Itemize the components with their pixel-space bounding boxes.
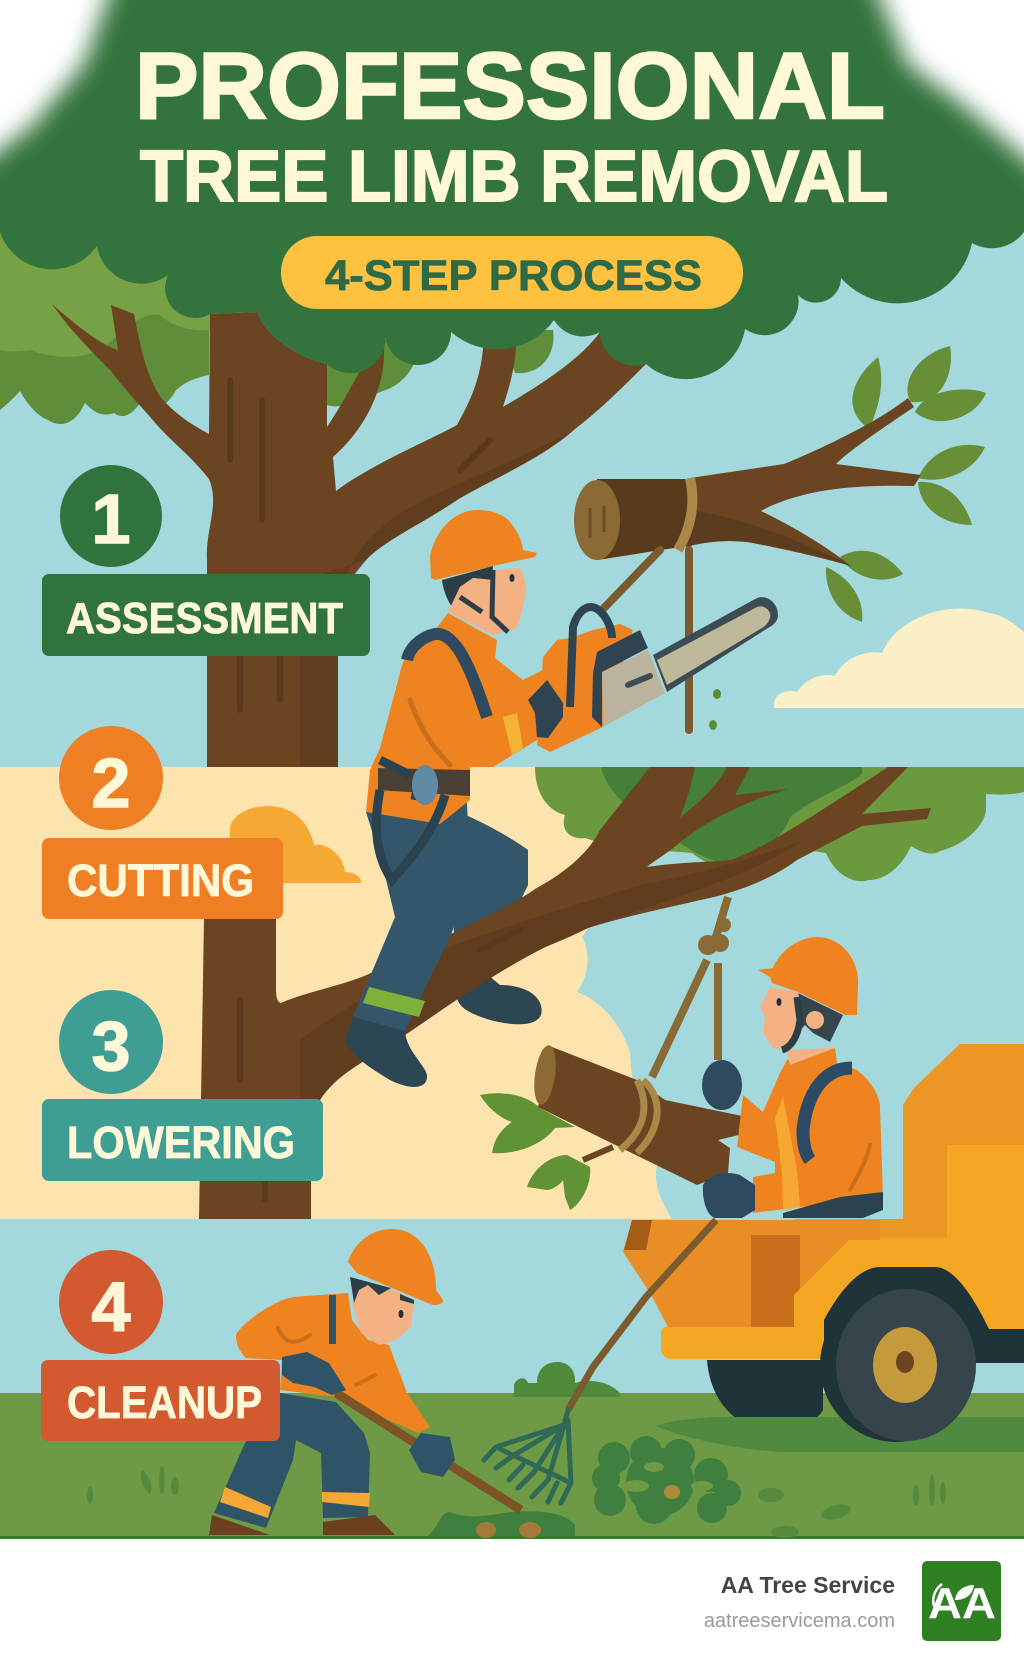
number 1: 1 (92, 480, 130, 558)
label: cutting (42, 838, 283, 919)
rake leaning on truck (484, 1220, 716, 1503)
logo: AA (928, 1579, 996, 1628)
trouser stripe (363, 987, 425, 1017)
title line 1: PROFESSIONAL (135, 33, 885, 138)
wheel arch (824, 1267, 1024, 1363)
number badge 3 (59, 990, 163, 1094)
label: assessment (42, 574, 370, 656)
helmet (758, 937, 858, 1015)
hair (350, 1277, 391, 1303)
hair (442, 566, 493, 608)
harness (378, 768, 470, 796)
fender (794, 1240, 947, 1330)
lowered limb with rope (480, 897, 752, 1210)
footer brand (704, 1561, 1001, 1641)
grass tufts and leaves (87, 1466, 946, 1538)
stripes (220, 1487, 271, 1518)
subtitle text: 4-STEP PROCESS (325, 252, 702, 300)
truck shadow (656, 1417, 1024, 1452)
face (760, 987, 800, 1050)
boots (209, 1515, 270, 1535)
debris at rake (428, 1511, 575, 1536)
label text: CLEANUP (67, 1377, 262, 1428)
label text: LOWERING (67, 1117, 295, 1168)
distant shrub (514, 1362, 620, 1397)
bumper (661, 1327, 830, 1359)
label text: CUTTING (67, 855, 254, 906)
chainsaw (537, 597, 778, 752)
label text: ASSESSMENT (66, 594, 343, 643)
support rope (604, 550, 689, 730)
number 3: 3 (92, 1007, 130, 1085)
logo (922, 1561, 1001, 1641)
lower glove (409, 1433, 455, 1477)
number 2: 2 (92, 744, 130, 822)
step 3: lowering (42, 990, 323, 1181)
left leg (353, 803, 470, 1031)
number 4: 4 (92, 1268, 131, 1346)
cab (830, 1044, 1024, 1330)
front wheel (820, 1288, 976, 1442)
torso (236, 1293, 430, 1433)
torso (737, 1048, 883, 1213)
subtitle pill (281, 236, 743, 309)
helmet (348, 1229, 443, 1305)
number badge 4 (59, 1250, 163, 1354)
rope knot (698, 918, 731, 955)
rake head (484, 1410, 571, 1503)
leaves on limb (826, 346, 986, 622)
helmet (430, 510, 537, 580)
step 1: assessment (42, 465, 370, 656)
cloud: orange behind cutting label (230, 806, 361, 883)
company name: AA Tree Service (721, 1572, 895, 1598)
face (448, 568, 526, 635)
placket (775, 1097, 800, 1210)
cloud: step 1 (774, 608, 1024, 708)
glove (528, 680, 563, 738)
rope lines (652, 897, 728, 1077)
worker 4: raking debris (209, 1229, 521, 1535)
lower trunk and limb at step 2 (199, 767, 931, 1219)
rake handle (336, 1393, 521, 1510)
hopper (623, 1220, 880, 1327)
canopy: dark green crown (0, 0, 1024, 379)
worker 2: lowering limb (702, 937, 883, 1218)
step 4: cleanup (41, 1250, 280, 1441)
label: lowering (42, 1099, 323, 1181)
log (538, 1047, 752, 1185)
leaves (480, 1093, 590, 1210)
boot (345, 1017, 427, 1087)
band 2 canopy (535, 767, 1024, 881)
foliage: light green behind tree (0, 232, 553, 424)
boot (783, 1192, 883, 1218)
hair (798, 993, 843, 1042)
upper glove (702, 1060, 742, 1110)
number badge 1 (60, 465, 162, 567)
face (352, 1283, 414, 1345)
worker 1 right leg behind branch (425, 800, 542, 1024)
tree trunk and upper branches (52, 304, 682, 767)
label: cleanup (41, 1360, 280, 1441)
cut limb with leaves (574, 346, 986, 622)
leaf pile (592, 1436, 741, 1524)
upper glove (282, 1352, 346, 1395)
worker 1: climbing with chainsaw (345, 510, 778, 1087)
number badge 2 (59, 726, 163, 830)
ground details (87, 1288, 1024, 1538)
truck: wood chipper (623, 1044, 1024, 1429)
title (135, 33, 888, 217)
rear wheel (707, 1360, 823, 1429)
chin strap (460, 570, 508, 632)
torso (366, 613, 543, 824)
white blurred top corners (0, 0, 1024, 182)
lower glove (703, 1173, 755, 1218)
legs (214, 1393, 370, 1528)
title line 2: TREE LIMB REMOVAL (140, 137, 888, 217)
backpack strap (803, 1068, 852, 1160)
chin strap (782, 997, 800, 1050)
sawdust (709, 689, 721, 730)
step 2: cutting (42, 726, 283, 919)
website: aatreeservicema.com (704, 1610, 895, 1632)
